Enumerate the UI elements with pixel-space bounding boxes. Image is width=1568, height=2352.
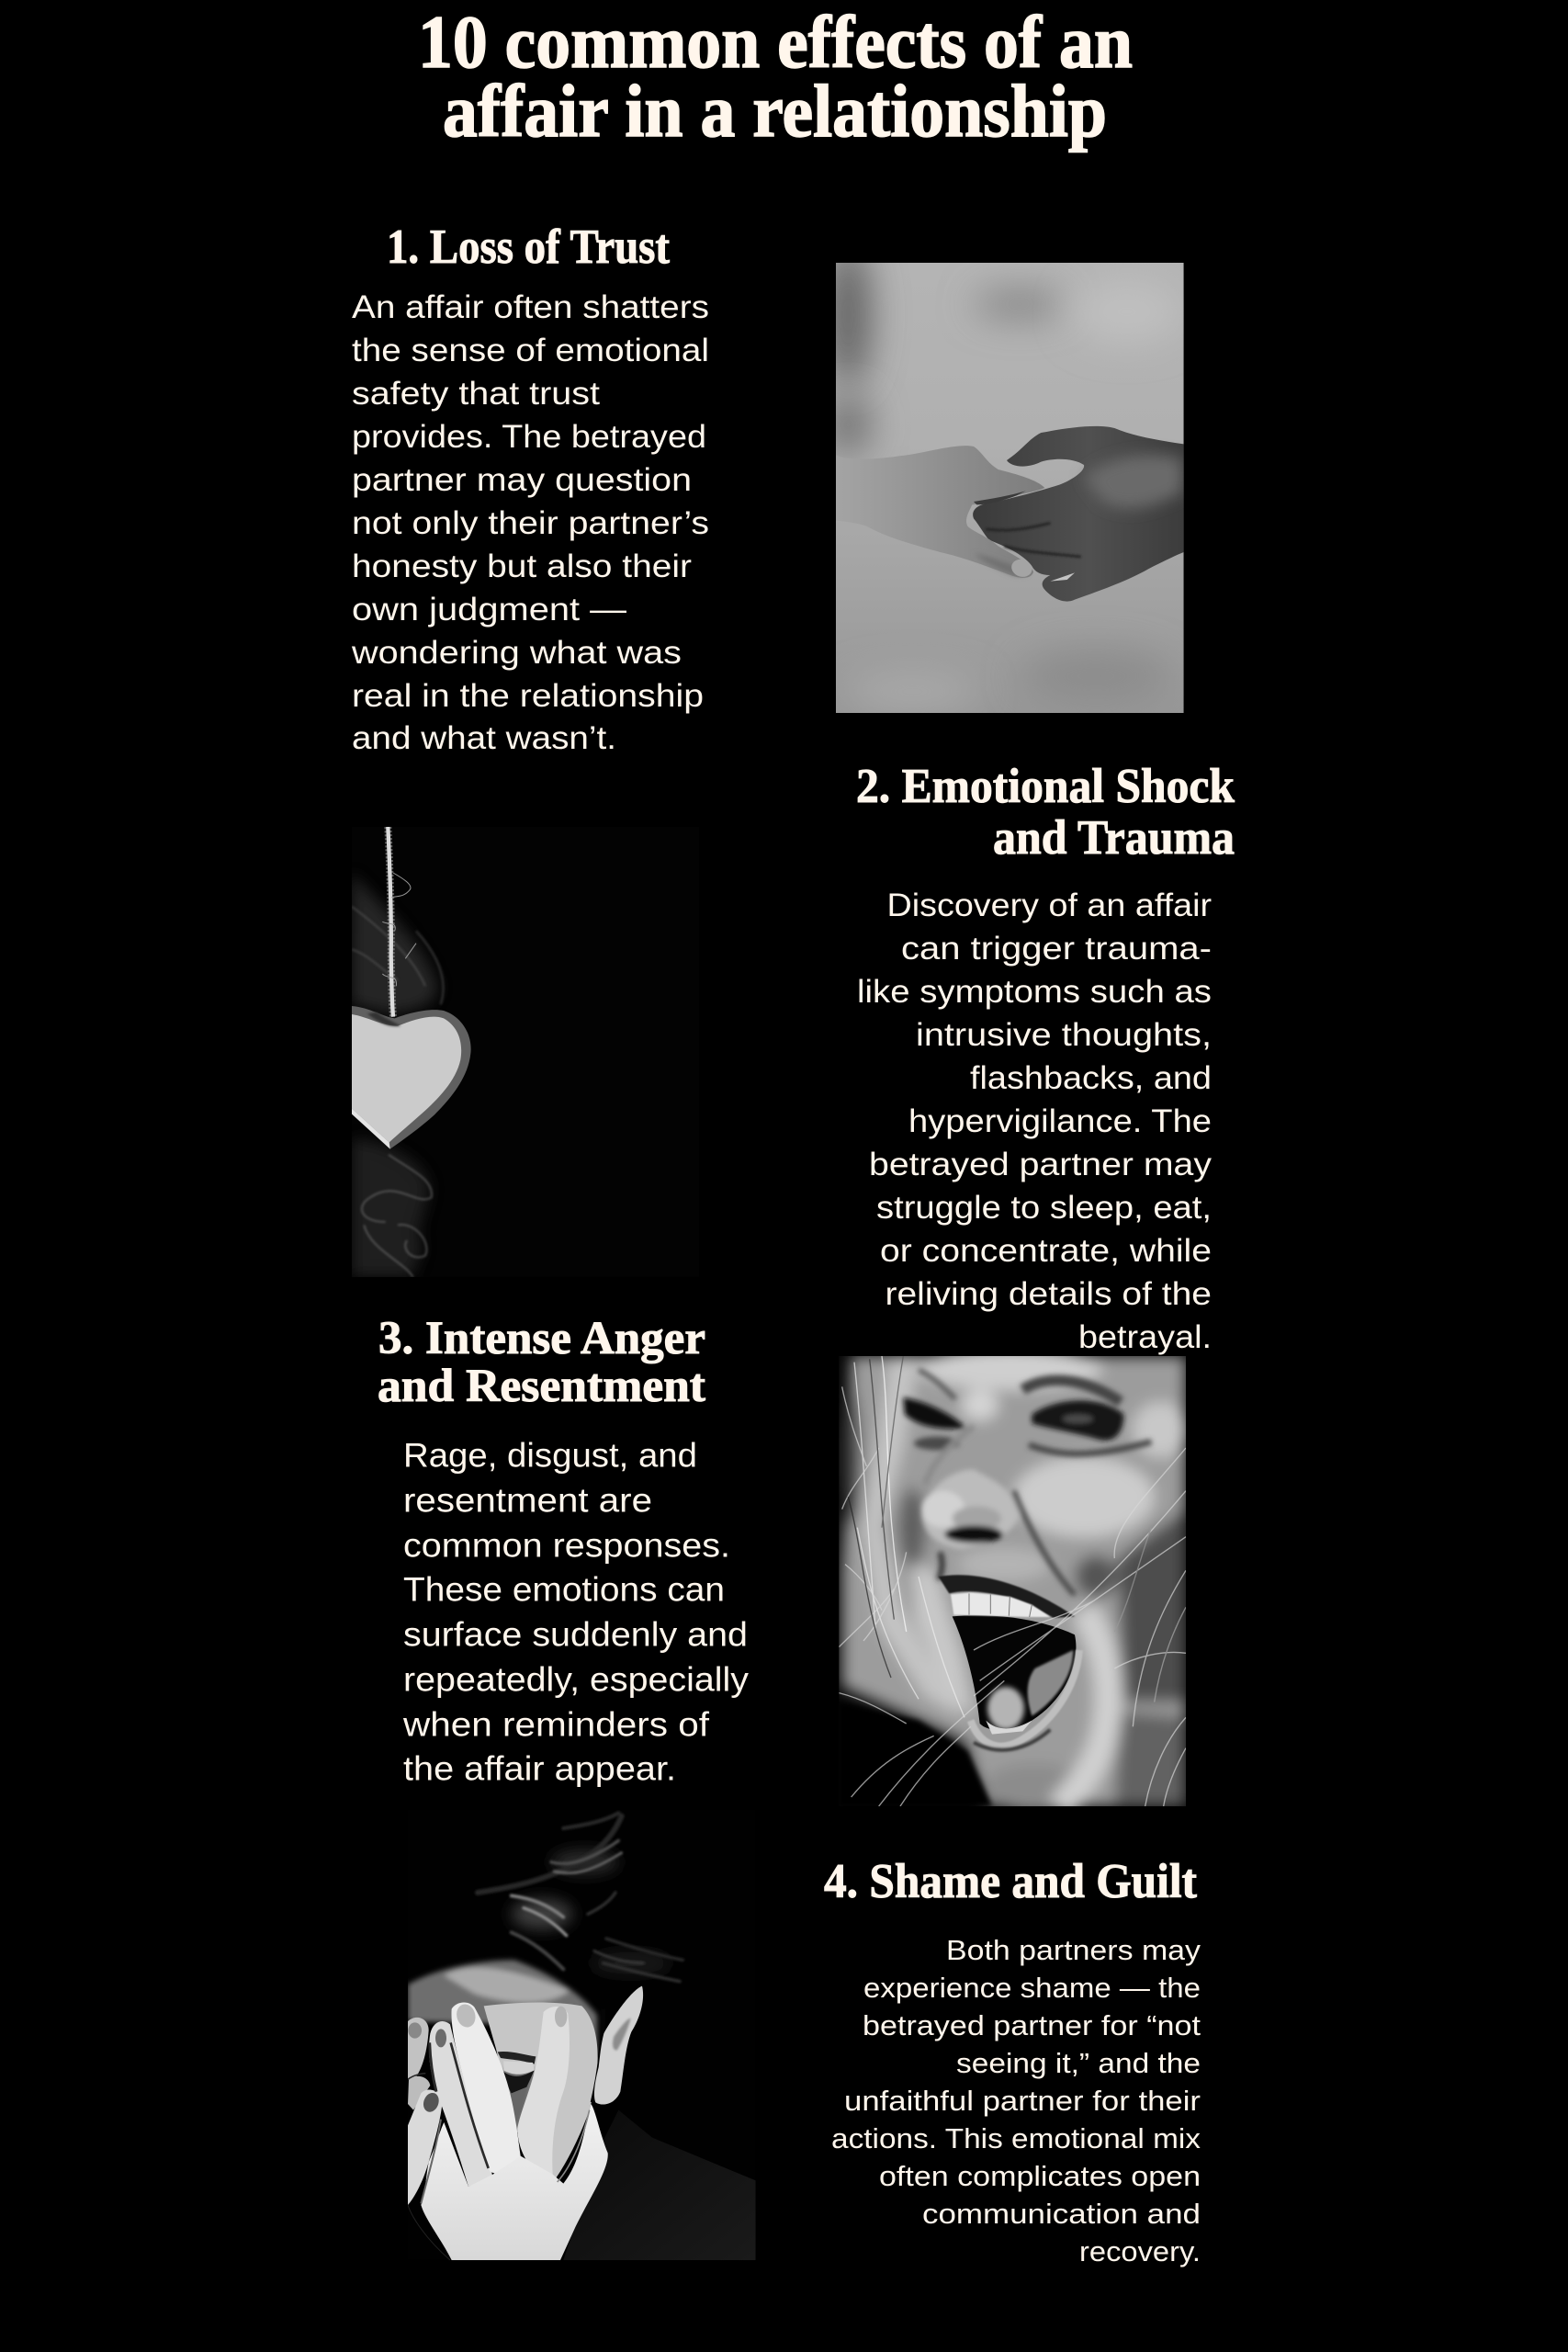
body text: shame and guilt: communication and: [922, 2198, 1201, 2230]
heading: 2. Emotional Shock and Trauma: and Trauma: [993, 811, 1235, 865]
light hand: [836, 446, 1044, 578]
photo: screaming woman: [839, 1347, 1188, 1813]
dark hand: [973, 426, 1184, 602]
body text: emotional shock: betrayal.: [1078, 1319, 1212, 1355]
body text: loss of trust: provides. The betrayed: [352, 419, 706, 455]
body text: loss of trust: and what wasn’t.: [352, 720, 616, 756]
hand: [408, 2003, 608, 2260]
photo: two hands reaching: [827, 242, 1184, 713]
body text: anger: [402, 1437, 750, 1788]
panel: 2. Emotional Shock and Trauma: [352, 760, 1235, 1355]
body text: emotional shock: or concentrate, while: [880, 1233, 1212, 1269]
heading: 2. Emotional Shock and Trauma: [856, 760, 1235, 865]
body text: emotional shock: [857, 888, 1213, 1355]
body text: shame and guilt: recovery.: [1079, 2235, 1201, 2267]
body text: emotional shock: intrusive thoughts,: [916, 1017, 1212, 1053]
body text: emotional shock: flashbacks, and: [970, 1060, 1212, 1096]
body text: loss of trust: honesty but also their: [352, 548, 692, 584]
body text: anger: resentment are: [403, 1481, 652, 1520]
body text: anger: surface suddenly and: [403, 1615, 748, 1654]
body text: loss of trust: partner may question: [352, 462, 692, 498]
body text: loss of trust: the sense of emotional: [352, 333, 709, 368]
body text: anger: the affair appear.: [403, 1749, 676, 1788]
hair highlights: [478, 1813, 682, 1982]
finger shading: [408, 2042, 590, 2260]
panel: 1. Loss of Trust: [351, 220, 1184, 756]
string: [388, 827, 393, 1017]
mouth: [953, 1615, 1076, 1730]
title: 10 common effects of an: [418, 0, 1133, 84]
heart: [352, 1006, 471, 1149]
hair sheen: [512, 1849, 671, 1974]
photo: man covering face: [408, 1810, 756, 2260]
body text: loss of trust: own judgment —: [352, 592, 626, 628]
body text: shame and guilt: betrayed partner for “not: [863, 2009, 1201, 2041]
body text: anger: common responses.: [403, 1527, 730, 1564]
body text: shame and guilt: unfaithful partner for their: [844, 2085, 1201, 2117]
jacket: [563, 2110, 756, 2260]
body text: emotional shock: betrayed partner may: [869, 1147, 1213, 1182]
body text: loss of trust: [351, 289, 709, 756]
body text: shame and guilt: experience shame — the: [863, 1972, 1201, 2004]
eyes and brows: [903, 1370, 1151, 1485]
body text: loss of trust: real in the relationship: [352, 678, 704, 714]
panel: 4. Shame and Guilt: [408, 1810, 1201, 2267]
body text: shame and guilt: actions. This emotional mix: [831, 2122, 1201, 2154]
body text: loss of trust: safety that trust: [352, 376, 600, 412]
body text: emotional shock: can trigger trauma-: [901, 931, 1212, 967]
title: affair in a relationship: [443, 69, 1107, 153]
body text: emotional shock: hypervigilance. The: [908, 1103, 1212, 1139]
ear: [594, 1986, 643, 2105]
body text: loss of trust: An affair often shatters: [352, 289, 709, 325]
body text: loss of trust: not only their partner’s: [352, 505, 709, 541]
heading: 3. Intense Anger and Resentment: [378, 1313, 705, 1412]
body text: shame and guilt: Both partners may: [946, 1934, 1201, 1966]
heading: 3. Intense Anger and Resentment: 3. Intense Anger: [378, 1313, 705, 1364]
body text: emotional shock: Discovery of an affair: [887, 888, 1212, 923]
photo: hanging heart with smoke: [352, 827, 471, 1277]
forehead: [408, 1960, 597, 2055]
body text: anger: repeatedly, especially: [403, 1661, 750, 1698]
body text: anger: Rage, disgust, and: [403, 1437, 697, 1474]
heading: 4. Shame and Guilt: 4. Shame and Guilt: [824, 1855, 1197, 1908]
body text: emotional shock: struggle to sleep, eat,: [876, 1190, 1212, 1226]
body text: anger: These emotions can: [403, 1571, 725, 1608]
panel: 3. Intense Anger and Resentment: [378, 1313, 1188, 1813]
body text: shame and guilt: seeing it,” and the: [956, 2047, 1201, 2079]
hair and skin tones: [842, 1347, 1188, 1813]
brow and eye: [498, 2052, 536, 2064]
nose: [921, 1469, 1075, 1595]
body text: emotional shock: like symptoms such as: [857, 974, 1212, 1010]
face: [484, 2002, 598, 2180]
body text: emotional shock: reliving details of the: [886, 1276, 1212, 1312]
body text: loss of trust: wondering what was: [351, 635, 682, 671]
body text: shame and guilt: often complicates open: [879, 2160, 1201, 2192]
heading: 2. Emotional Shock and Trauma: 2. Emotional Shock: [856, 760, 1235, 813]
body text: shame and guilt: [831, 1934, 1201, 2267]
title: [418, 0, 1133, 153]
heading: 1. Loss of Trust: 1. Loss of Trust: [387, 220, 670, 274]
body text: anger: when reminders of: [402, 1705, 710, 1744]
heading: 3. Intense Anger and Resentment: and Resentment: [378, 1361, 705, 1412]
infographic canvas: [351, 13, 1235, 2267]
loose hair strands: [839, 1356, 1186, 1806]
